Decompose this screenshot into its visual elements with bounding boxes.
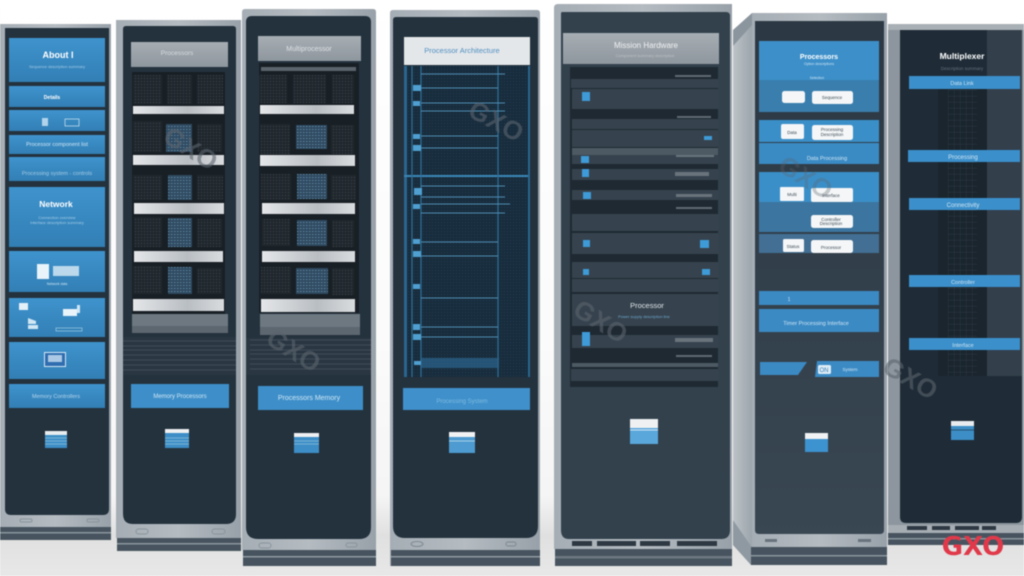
rack 7 blue bars: Processing [948,155,978,161]
rack 4: blue schematic [390,10,540,566]
rack 1 blue sections [9,38,105,408]
rack 7 blue bars: Data Link [950,81,974,87]
rack 7: multiplexer [888,24,1024,545]
rack 6 base [751,547,887,565]
rack 7 title: Multiplexer [940,51,985,61]
rack 1 small chart icon [45,431,67,448]
rack 2 vent block [132,314,228,333]
rack 1 labels: Connection overview [38,215,76,220]
logo: GXO: GXO [942,532,1004,562]
rack 6 option pills [780,91,853,253]
rack 6 lower bars text: Timer Processing Interface [783,321,849,327]
rack 3 stripes [246,338,371,375]
rack 1 labels: Details [44,95,60,101]
rack 6 option pills: Multi [787,192,797,197]
rack 7 blue bars: Controller [951,280,975,286]
rack 6 option pills: Status [787,244,800,249]
rack 1: about panel [0,24,111,540]
rack 1 labels: Memory Controllers [32,394,80,400]
rack 6 tabs [760,361,879,377]
rack 7 title: Description summary [941,66,984,71]
rack 5 dark face [561,12,730,539]
rack 5 switch rows [570,67,718,387]
rack 6 dark face [755,21,884,534]
rack 3 vent block [260,314,360,335]
rack 2 stripes [123,337,236,375]
rack 4 button: Processing System [436,399,488,405]
rack 5 processor label: Processor [630,301,664,310]
rack 2 header [131,42,228,67]
rack 6 option pills: Interface [822,193,840,198]
rack 6 option pills: Description [821,132,844,137]
watermarks [158,94,943,406]
rack 2 button: Memory Processors [153,394,207,400]
rack 6 lower bars text: 1 [788,297,791,303]
rack 6 blue sections [759,41,879,332]
watermarks: GXO [878,351,943,406]
rack 7 vents [907,526,996,530]
rack 5 header: Mission Hardware [614,41,679,50]
rack 1 labels: Sequence description summary [29,64,85,69]
rack 1 labels: Interface description summary [30,220,84,225]
rack 4 button [403,388,530,410]
rack 2 drive rows [132,72,225,318]
rack 6 option pills: Sequence [822,95,843,100]
rack 6 feet [765,539,871,542]
rack 7 base [888,525,1024,545]
rack 2: storage [116,20,241,551]
rack 2 base [117,538,241,551]
rack 4 feet [411,542,516,546]
rack 6 option pills: Data [787,130,797,135]
rack 3: multiprocessor [242,9,376,566]
rack 6 option pills: Description [820,221,843,226]
rack 7 center grid [938,89,987,376]
rack 1 labels: Processing system - controls [22,171,92,177]
rack 3 drive rows [259,63,359,313]
rack 3 small chart icon [294,433,319,453]
rack 3 base [243,550,376,566]
rack 6 option pills: Processing [821,127,844,132]
rack 6 lower bars text [783,297,849,327]
rack 3 feet [259,543,357,548]
watermarks: GXO [773,149,838,205]
rack 6 option pills: Controller [821,217,841,222]
rack 4 base [391,550,540,566]
rack 7 title [940,51,985,71]
rack 6 heading: Selection [810,76,824,80]
rack 5 processor label: Power supply description line [618,314,671,319]
rack 1 icons [19,118,82,366]
rack 6 tabs: ON [820,368,828,374]
rack 4 header: Processor Architecture [424,46,500,55]
rack 5 small chart icon [630,419,658,444]
rack 7 blue bars: Interface [952,343,974,349]
rack 7 small chart icon [951,421,974,440]
rack 6: options [733,13,887,565]
rack 3 white strips [260,105,355,312]
rack 4 schematic [404,66,530,377]
rack 6 heading: Option descriptions [804,62,834,66]
rack 7 right panel [987,30,1022,376]
rack 2 header: Processors [161,50,194,57]
rack 2 white strips [133,106,224,311]
rack 6 side wall [733,13,752,565]
rack 2 small chart icon [165,429,189,448]
rack 5 header: Component summary description [616,53,674,58]
rack 2 feet [136,529,225,534]
rack 4 small chart icon [449,432,475,453]
rack 6 tabs: System [842,367,858,372]
rack 7 blue bars: Connectivity [947,203,979,209]
rack 3 dark face [246,16,371,539]
rack 4 header [404,37,530,65]
rack 5: switch stack [554,4,732,566]
rack 3 header [258,36,361,61]
rack 5 header [563,33,719,64]
rack 6 heading: Processors [800,54,838,61]
rack 1 labels: Network [39,199,73,209]
rack 2 dark face [123,26,236,524]
rack 4 dark face [393,17,538,538]
rack 1 labels: About I [42,50,74,60]
rack 6 small chart icon [805,433,828,452]
rack 1 feet [20,519,99,522]
rack 5 base [555,549,732,566]
rack 3 button: Processors Memory [278,395,341,402]
rack 6 band label: Data Processing [807,156,847,162]
rack 6 option pills: Processor [821,245,842,250]
rack 1 base [0,527,111,540]
rack 1 labels: Network data [47,282,67,286]
rack 5 status lights [581,92,712,346]
rack 7 dark face [900,30,1022,523]
rack 3 button [258,386,363,410]
watermarks: GXO [464,94,529,148]
watermarks: GXO [261,322,326,378]
rack 2 button [131,384,229,408]
rack 1 labels: Processor component list [26,142,88,148]
rack 1 labels [22,50,92,400]
rack 5 processor label [618,301,671,319]
watermarks: GXO [158,120,223,176]
rack 3 header: Multiprocessor [286,46,332,53]
rack 7 blue bars [908,76,1020,350]
rack 1 dark face [5,28,109,515]
rack 6 heading [800,54,838,80]
rack 5 vents [572,541,717,546]
watermarks: GXO [568,293,633,349]
